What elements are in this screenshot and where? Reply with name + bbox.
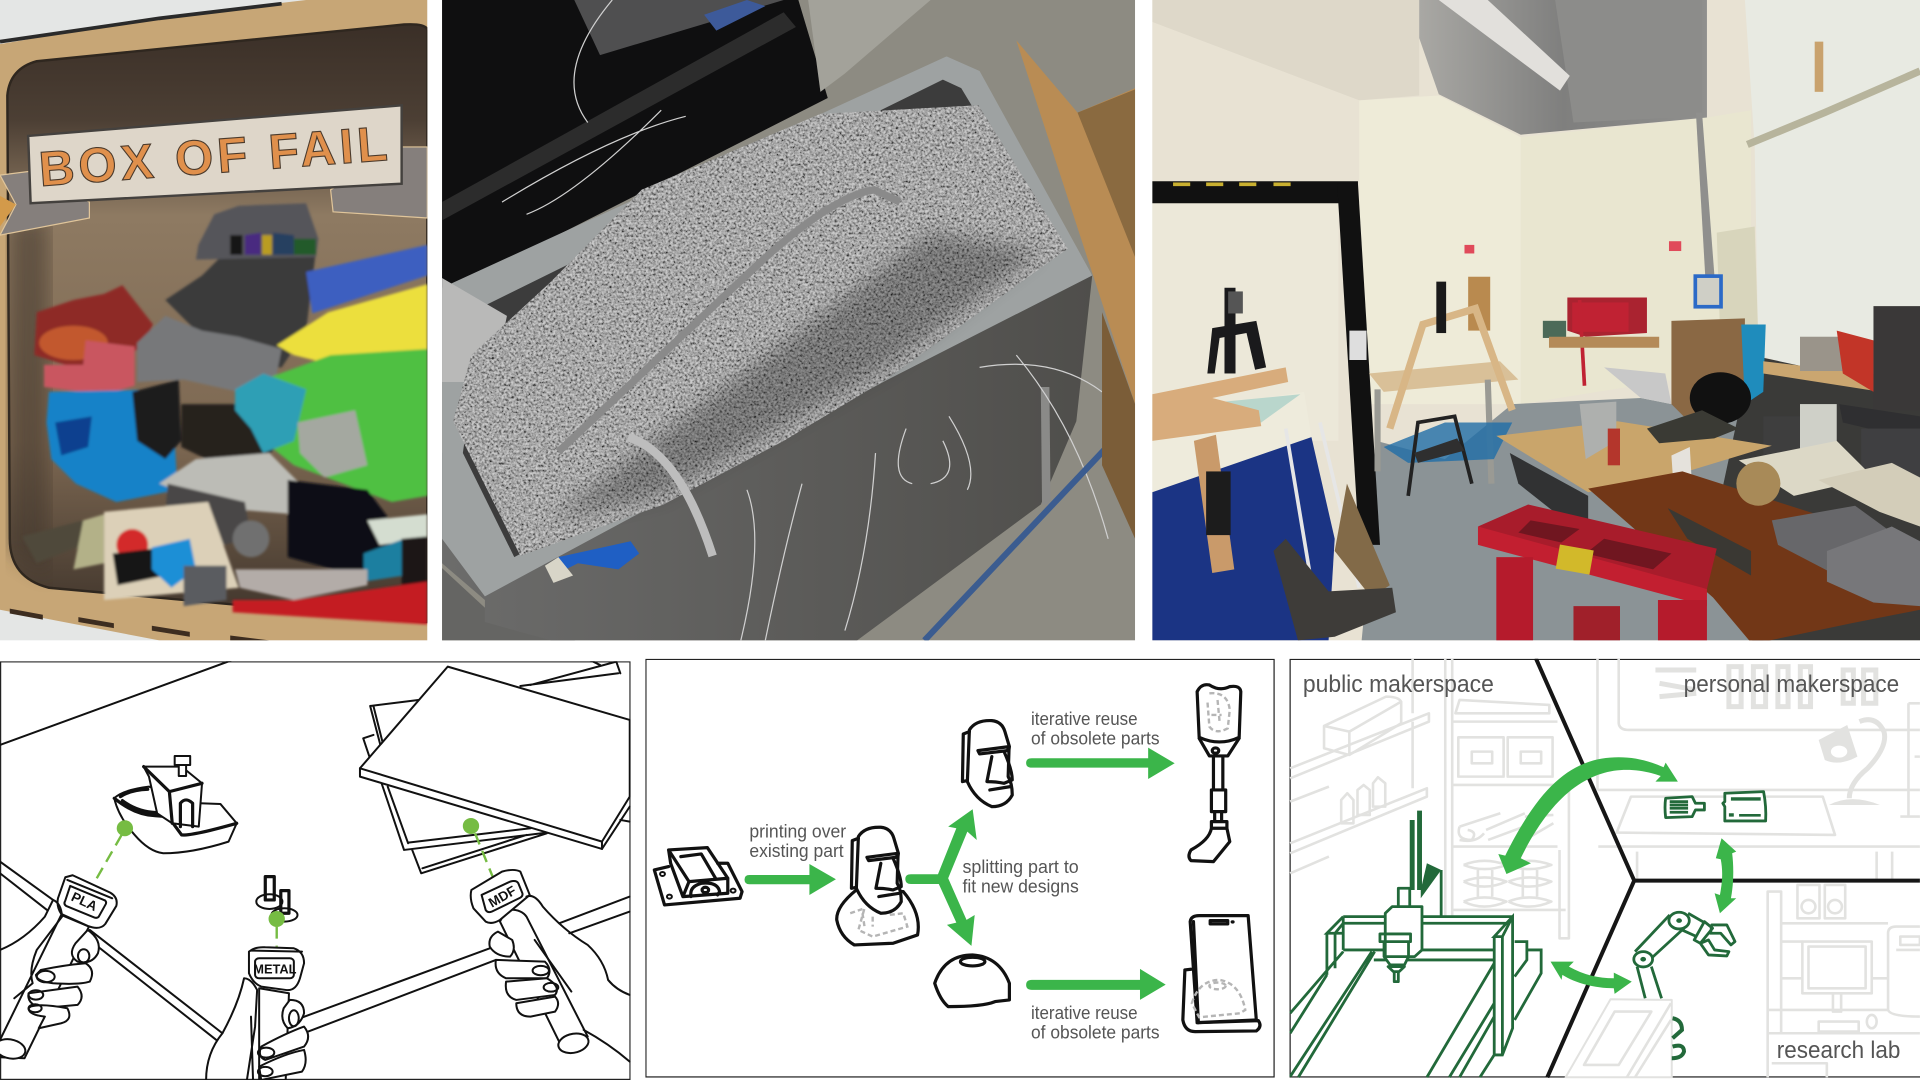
dashed scan beams: [94, 833, 493, 947]
red-brown table: [1588, 471, 1920, 644]
stack of boards: [360, 660, 630, 873]
icon: small motor: [1665, 797, 1704, 818]
caption: splitting part: splitting part to: [962, 856, 1079, 877]
caption: printing over existing part: existing part: [749, 840, 844, 861]
robot stand on pool: [1207, 288, 1266, 373]
arrow: public to research: [1551, 962, 1632, 994]
floor: [1362, 398, 1763, 640]
caption: iterative reuse bottom: [1031, 1002, 1160, 1042]
icon: moai head: [962, 721, 1012, 807]
metal fasteners: [256, 877, 298, 922]
caption: iterative reuse top: [1031, 708, 1160, 748]
arrow: personal to research: [1715, 838, 1736, 913]
background: personal makerspace: [1597, 658, 1920, 880]
caption: printing over existing part: [749, 821, 846, 861]
table edges: [0, 661, 630, 1040]
icon: half dome: [935, 955, 1009, 1007]
benchy boat: [114, 756, 237, 853]
icon: moai on bracket: [837, 827, 918, 945]
scanner label PLA: PLA: [69, 889, 100, 914]
arrow: iterative reuse bottom: [1026, 969, 1166, 1000]
background: public makerspace: [1290, 658, 1569, 938]
laser cutter cabinet: [1543, 298, 1659, 386]
tan workbench: [1496, 421, 1772, 492]
arrow: split: [905, 809, 977, 946]
arrow: printing over: [745, 864, 836, 895]
scanning line art: [0, 660, 630, 1080]
photo: workshop room: [1152, 0, 1920, 644]
left scanner and hand: [0, 875, 117, 1062]
icon: phone stand: [1183, 916, 1260, 1032]
black frame: [1152, 181, 1380, 545]
middle scanner and hand: [206, 947, 308, 1080]
arrow: public to personal: [1498, 757, 1678, 874]
3d printer: [1290, 811, 1541, 1077]
scanner label METAL: METAL: [253, 961, 297, 976]
caption: splitting part: fit new designs: [962, 876, 1079, 897]
panel: makerspace network: [1290, 658, 1920, 1077]
arrow: iterative reuse top: [1026, 748, 1175, 779]
pool: [1152, 392, 1359, 640]
dark clutter behind benches: [1714, 355, 1920, 640]
caption: iterative reuse top: iterative reuse: [1031, 708, 1138, 729]
background: research lab: [1768, 885, 1920, 1077]
icon: prosthetic leg: [1189, 685, 1241, 862]
icon: mounting bracket: [654, 848, 742, 905]
caption: splitting part: [962, 856, 1079, 897]
red hydraulic press: [1478, 504, 1717, 640]
icon: circuit board: [1723, 792, 1766, 821]
divider lines: [1536, 658, 1920, 1077]
label: research lab: research lab: [1777, 1037, 1900, 1064]
icon: robot arm: [1634, 912, 1735, 998]
bench equipment right: [1763, 306, 1920, 490]
banner ribbons: [0, 147, 427, 235]
caption: printing over existing part: printing over: [749, 821, 846, 842]
panel: material scanning: [0, 660, 630, 1080]
label: personal makerspace: personal makerspace: [1684, 671, 1899, 698]
photo: metal shavings bin: [442, 0, 1135, 640]
photo: box of fail: [0, 0, 427, 640]
workflow drawing: [654, 685, 1260, 1032]
background cart: [1566, 999, 1684, 1077]
right scanner and hand: [471, 870, 630, 1062]
wooden tripod and tables: [1369, 282, 1518, 484]
banner plate: [28, 105, 402, 203]
shavings: [453, 105, 1068, 556]
label: public makerspace: public makerspace: [1303, 671, 1494, 698]
scanner label MDF: MDF: [486, 883, 519, 910]
panel: reuse workflow: [646, 659, 1274, 1077]
caption: iterative reuse top: of obsolete parts: [1031, 727, 1160, 748]
green target dots: [117, 818, 479, 927]
bin body: [442, 274, 1092, 640]
banner title: BOX OF FAIL: [37, 117, 389, 197]
caption: iterative reuse bottom: of obsolete parts: [1031, 1021, 1160, 1042]
frame tab slots: [10, 609, 269, 640]
caption: iterative reuse bottom: iterative reuse: [1031, 1002, 1138, 1023]
makerspace drawing: [1290, 658, 1920, 1077]
